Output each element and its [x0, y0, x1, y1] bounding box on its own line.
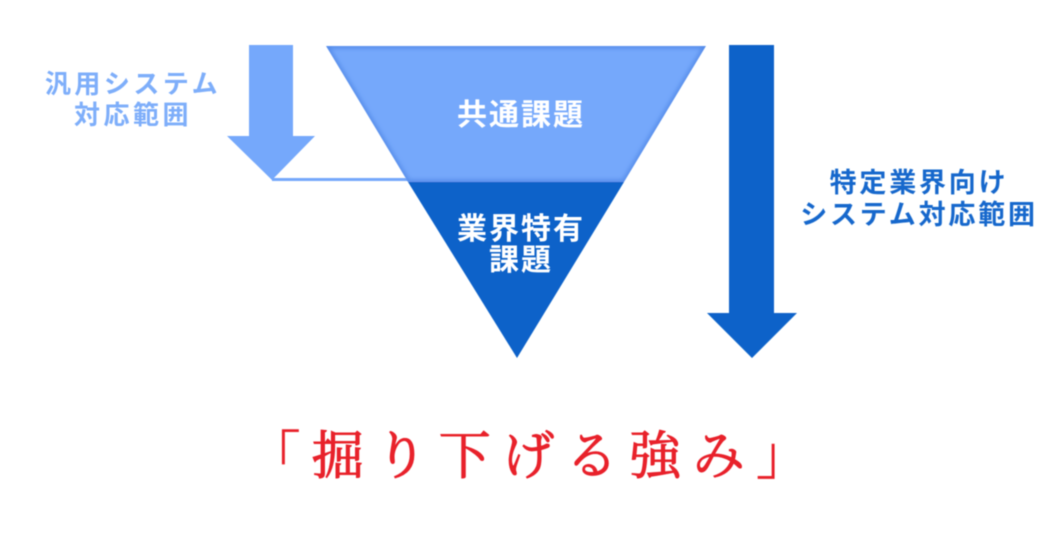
label: general system coverage: 汎用システム — [45, 69, 221, 99]
segment: common issues — [326, 46, 706, 182]
label: general system coverage — [45, 69, 221, 130]
segment: industry-specific issues — [408, 182, 624, 358]
label: industry system coverage — [800, 168, 1038, 230]
label: common issues: 共通課題 — [457, 99, 585, 132]
arrow: industry system coverage — [707, 45, 797, 358]
label: industry system coverage: 特定業界向け — [830, 168, 1008, 198]
label: industry-specific issues — [457, 213, 585, 277]
label: general system coverage: 対応範囲 — [74, 100, 192, 130]
tagline: 「掘り下げる強み」 — [248, 429, 820, 486]
label: industry-specific issues: 課題 — [489, 244, 553, 277]
label: industry system coverage: システム対応範囲 — [800, 200, 1038, 230]
label: industry-specific issues: 業界特有 — [457, 213, 585, 246]
inverted triangle diagram — [326, 46, 706, 358]
arrow: general system coverage — [227, 45, 412, 181]
